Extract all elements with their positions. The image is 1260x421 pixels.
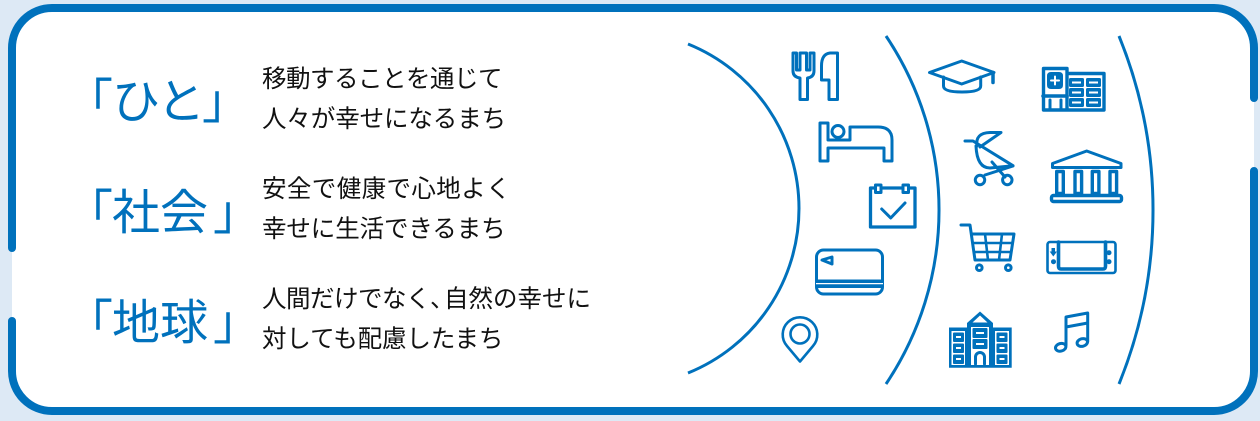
text block: chikyu description: 人間だけでなく、	[262, 286, 454, 313]
icon: card	[816, 250, 884, 294]
arc: middle ring	[886, 36, 939, 384]
text block: shakai description: 幸せに生活できるまち	[262, 215, 506, 243]
arc: outer ring	[1119, 36, 1153, 384]
text block: chikyu description	[262, 285, 591, 353]
arc: inner ring	[688, 44, 799, 373]
text block: shakai description: 安全で健康で心地よく	[262, 175, 511, 203]
heading: hito: 「ひと」	[65, 76, 250, 129]
text block: hito description: 人々が幸せになるまち	[262, 105, 506, 133]
icon: music notes	[1055, 313, 1088, 352]
text block: chikyu description: 自然の幸せに	[444, 285, 591, 313]
icon: calendar	[870, 185, 915, 227]
icon: map pin	[783, 317, 817, 362]
heading: shakai: 「社会」	[65, 187, 261, 240]
icon: shopping cart	[961, 225, 1014, 271]
heading: chikyu: 「地球」	[65, 297, 261, 350]
text block: shakai description	[262, 175, 511, 243]
icon: school building	[949, 312, 1012, 368]
icon: stroller	[965, 132, 1013, 185]
icon: hospital	[1043, 68, 1104, 110]
text block: chikyu description: 対しても配慮したまち	[262, 325, 503, 353]
icon: fork and knife	[793, 53, 838, 100]
text block: hito description: 移動することを通じて	[262, 65, 502, 93]
icon: handheld game console	[1048, 242, 1116, 273]
text block: hito description	[262, 65, 506, 133]
icon: bed	[820, 123, 892, 161]
icon: museum building	[1052, 151, 1122, 202]
icon: graduation cap	[930, 61, 994, 92]
